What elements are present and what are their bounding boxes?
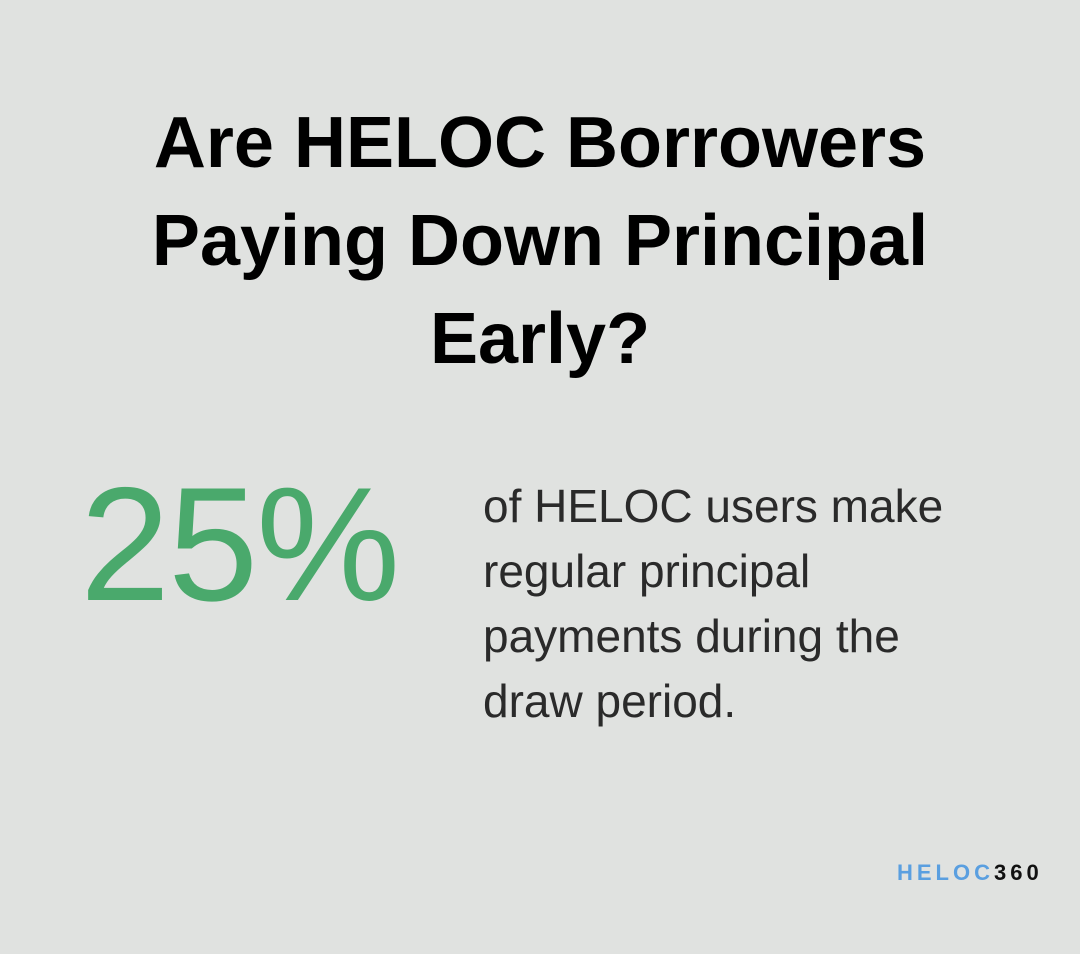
stat description: [483, 480, 943, 727]
stat description: regular principal: [483, 545, 810, 597]
logo: HELOC360: [897, 860, 1043, 885]
stat description: draw period.: [483, 675, 736, 727]
stat number: 25%: [80, 454, 398, 635]
title: Are HELOC Borrowers: [154, 103, 926, 183]
stat description: payments during the: [483, 610, 900, 662]
title: [152, 103, 928, 379]
stat description: of HELOC users make: [483, 480, 943, 532]
title: Paying Down Principal: [152, 201, 928, 281]
title: Early?: [430, 299, 650, 379]
